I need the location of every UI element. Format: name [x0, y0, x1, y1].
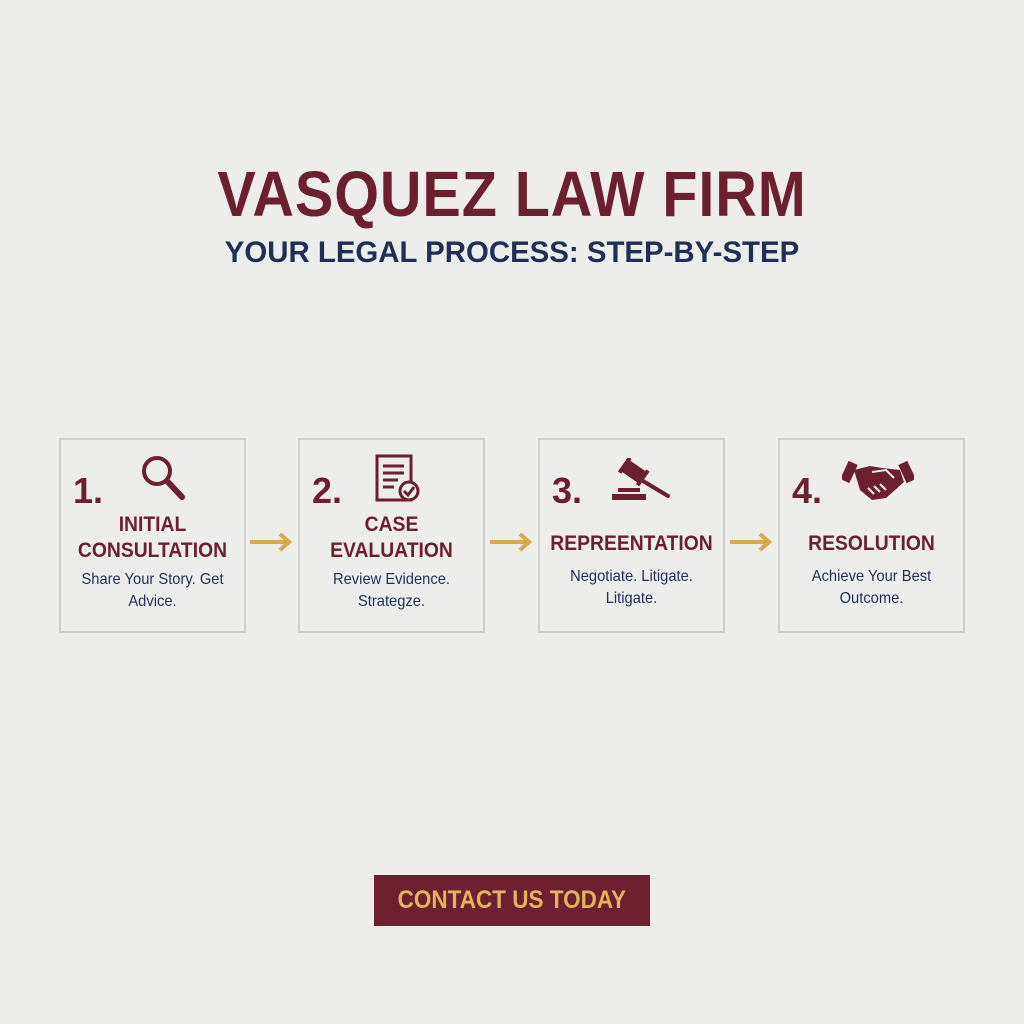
- panel: step 2: [298, 438, 485, 633]
- heading: CASE: [365, 513, 418, 536]
- step number 3: 3.: [552, 470, 582, 511]
- description: [333, 571, 450, 610]
- step number 1: 1.: [73, 470, 103, 511]
- description: Outcome.: [840, 590, 903, 607]
- arrow 1: [250, 532, 292, 552]
- heading: RESOLUTION: [808, 532, 935, 555]
- step number 2: 2.: [312, 470, 342, 511]
- description: [570, 568, 693, 607]
- heading: [330, 513, 453, 562]
- icon: document check: [376, 454, 420, 502]
- button: contact: CONTACT US TODAY: [398, 886, 626, 914]
- description: Review Evidence.: [333, 571, 450, 588]
- heading: [78, 513, 227, 562]
- description: [812, 568, 932, 607]
- button: contact: [374, 875, 650, 926]
- panel: step 4: [778, 438, 965, 633]
- description: Share Your Story. Get: [81, 571, 224, 588]
- arrow 3: [730, 532, 772, 552]
- heading: REPREENTATION: [550, 532, 713, 555]
- description: Negotiate. Litigate.: [570, 568, 693, 585]
- panel: step 3: [538, 438, 725, 633]
- panel: step 1: [59, 438, 246, 633]
- arrow 2: [490, 532, 532, 552]
- subtitle: YOUR LEGAL PROCESS: STEP-BY-STEP: [225, 236, 799, 269]
- title: VASQUEZ LAW FIRM: [217, 158, 807, 230]
- description: Litigate.: [606, 590, 657, 607]
- description: Achieve Your Best: [812, 568, 931, 585]
- heading: CONSULTATION: [78, 539, 227, 562]
- step number 4: 4.: [792, 470, 822, 511]
- description: [81, 571, 224, 610]
- icon: magnifying glass: [142, 456, 185, 500]
- description: Strategze.: [358, 593, 425, 610]
- icon: handshake: [842, 460, 914, 500]
- heading: INITIAL: [119, 513, 186, 536]
- icon: gavel: [612, 458, 670, 500]
- description: Advice.: [128, 593, 177, 610]
- heading: EVALUATION: [330, 539, 453, 562]
